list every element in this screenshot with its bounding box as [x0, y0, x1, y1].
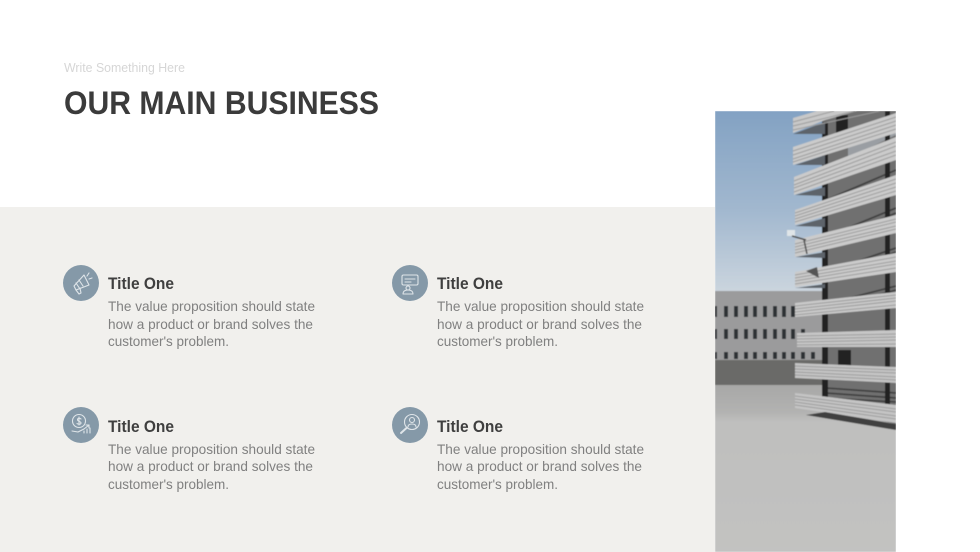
description: customer's problem.: [108, 476, 229, 492]
item: title one, top right: [392, 265, 644, 349]
title: Title One: [437, 274, 503, 293]
description: The value proposition should state: [108, 441, 315, 457]
description: how a product or brand solves the: [108, 316, 313, 332]
description: The value proposition should state: [437, 298, 644, 314]
main heading: OUR MAIN BUSINESS: [64, 85, 379, 121]
item: title one, top left: [63, 265, 315, 349]
description: [437, 441, 644, 492]
panel: business items background: [0, 207, 715, 552]
subtitle: Write Something Here: [64, 61, 185, 75]
icon: dollar growth: [63, 407, 99, 443]
icon: magnifier with person: [392, 407, 428, 443]
description: customer's problem.: [437, 476, 558, 492]
title: Title One: [108, 274, 174, 293]
description: [108, 441, 315, 492]
description: customer's problem.: [437, 333, 558, 349]
description: The value proposition should state: [437, 441, 644, 457]
icon: presentation screen: [392, 265, 428, 301]
description: how a product or brand solves the: [437, 458, 642, 474]
title: Title One: [437, 417, 503, 436]
description: The value proposition should state: [108, 298, 315, 314]
description: [108, 298, 315, 349]
icon: megaphone: [63, 265, 99, 301]
item: title one, bottom left: [63, 407, 315, 492]
description: customer's problem.: [108, 333, 229, 349]
title: Title One: [108, 417, 174, 436]
description: how a product or brand solves the: [108, 458, 313, 474]
description: [437, 298, 644, 349]
item: title one, bottom right: [392, 407, 644, 492]
photo: modern building: [715, 100, 896, 552]
description: how a product or brand solves the: [437, 316, 642, 332]
